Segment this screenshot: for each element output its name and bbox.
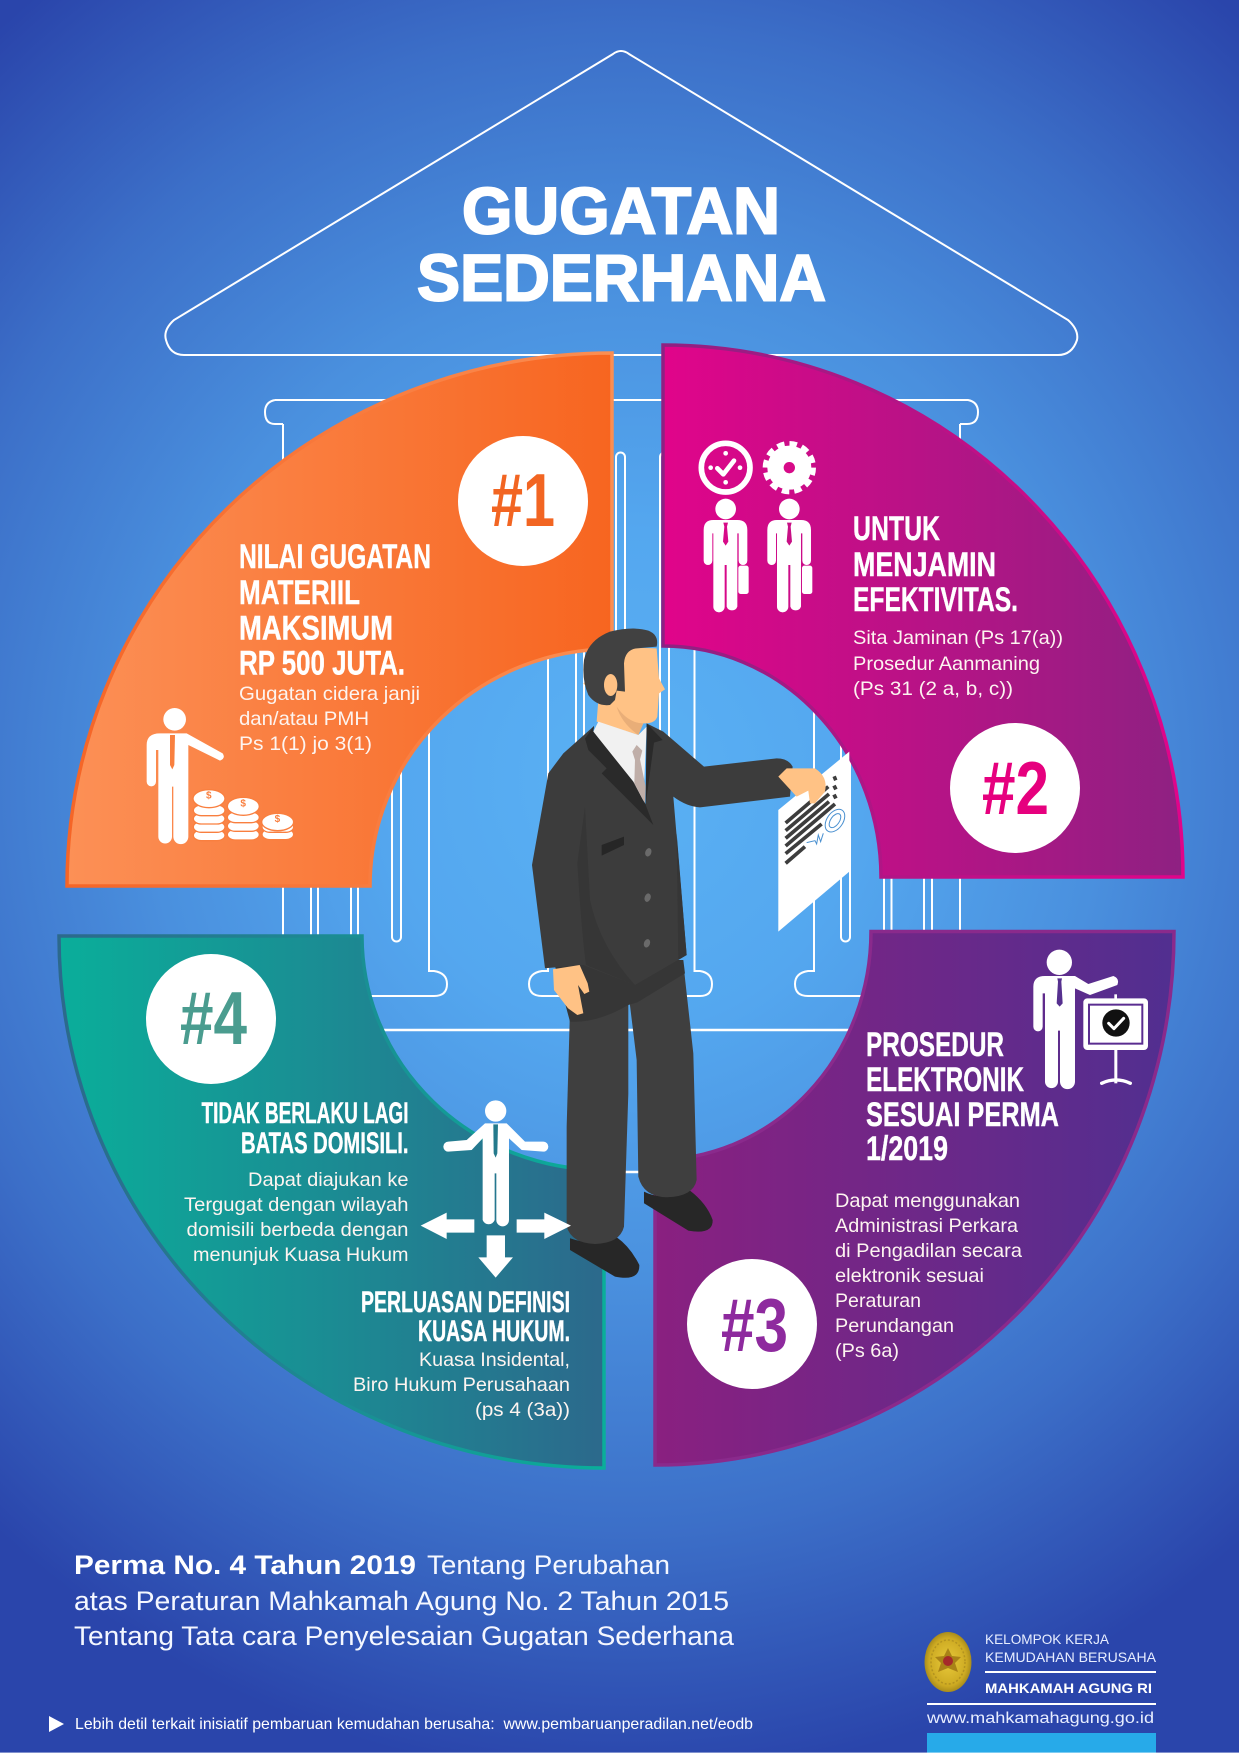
text 3: Administrasi Perkara (835, 1215, 1018, 1237)
heading 1: MATERIIL (239, 574, 360, 612)
heading 3 (866, 1026, 1059, 1168)
badge #1: #1 (491, 458, 555, 542)
title (417, 174, 826, 314)
organisation block: KELOMPOK KERJA (985, 1631, 1110, 1647)
column outlines of courthouse (265, 400, 980, 1172)
title: SEDERHANA (417, 240, 826, 314)
heading 1: NILAI GUGATAN (239, 538, 431, 576)
shirt (593, 722, 647, 804)
text 2: Prosedur Aanmaning (853, 653, 1040, 675)
heading 3: ELEKTRONIK (866, 1061, 1024, 1099)
hair (583, 629, 657, 705)
organisation block (926, 1631, 1157, 1753)
badge #3: #3 (721, 1283, 788, 1367)
badge #2: #2 (982, 746, 1049, 830)
panel 3: purple quarter ring (655, 932, 1174, 1465)
text 1: Gugatan cidera janji (239, 683, 420, 705)
heading 2 (853, 510, 1018, 619)
badge #4 (146, 954, 276, 1084)
footer title (74, 1550, 735, 1651)
illustration: businessman holding document (532, 629, 849, 1278)
icon: presenter with board (1033, 950, 1148, 1089)
jacket (532, 723, 793, 985)
heading 4a (202, 1097, 408, 1160)
heading 4a: BATAS DOMISILI. (241, 1127, 408, 1160)
heading 2: UNTUK (853, 510, 940, 548)
icon: man with direction arrows (421, 1100, 571, 1278)
text 4a: Tergugat dengan wilayah (184, 1194, 408, 1216)
roof outline of courthouse (165, 51, 1077, 355)
heading 4b: KUASA HUKUM. (418, 1315, 570, 1348)
text 4a: Dapat diajukan ke (248, 1169, 408, 1191)
text 1: dan/atau PMH (239, 708, 369, 730)
footer title: Tentang Tata cara Penyelesaian Gugatan Sederhana (74, 1621, 735, 1651)
text 3 (835, 1190, 1022, 1362)
title: GUGATAN (462, 174, 780, 248)
footer link line: Lebih detil terkait inisiatif pembaruan kemudahan berusaha: www.pembaruanperadilan.net/eodb (75, 1716, 753, 1733)
text 3: Dapat menggunakan (835, 1190, 1020, 1212)
text 3: elektronik sesuai (835, 1265, 984, 1287)
organisation block: MAHKAMAH AGUNG RI (985, 1680, 1152, 1696)
heading 4b (361, 1286, 570, 1348)
organisation block: KEMUDAHAN BERUSAHA (985, 1649, 1157, 1665)
footer title: Perma No. 4 Tahun 2019 (74, 1550, 416, 1580)
text 1: Ps 1(1) jo 3(1) (239, 733, 372, 755)
text 3: Peraturan (835, 1290, 921, 1312)
legs and shoes (553, 960, 713, 1278)
heading 4a: TIDAK BERLAKU LAGI (202, 1097, 408, 1130)
text 4b (353, 1349, 570, 1421)
heading 3: SESUAI PERMA (866, 1096, 1059, 1134)
logo: Mahkamah Agung seal (924, 1632, 972, 1692)
panel 1: orange quarter ring (67, 353, 612, 886)
badge #4: #4 (180, 976, 247, 1060)
torso, head and arms (532, 629, 849, 1015)
heading 2: EFEKTIVITAS. (853, 581, 1018, 619)
text 4a (184, 1169, 408, 1266)
lapels (585, 726, 653, 825)
holding hand (778, 768, 826, 803)
text 1 (239, 683, 420, 755)
doc (778, 752, 849, 932)
text 4a: domisili berbeda dengan (186, 1219, 408, 1241)
panel 2: magenta quarter ring (663, 345, 1183, 877)
text 4b: (ps 4 (3a)) (475, 1399, 570, 1421)
footer title: Tentang Perubahan (427, 1550, 670, 1580)
text 3: (Ps 6a) (835, 1340, 899, 1362)
text 2: (Ps 31 (2 a, b, c)) (853, 678, 1013, 700)
text 2 (853, 627, 1063, 700)
icon: man with coins: $ (206, 791, 212, 802)
lower hand (553, 965, 589, 1015)
icon: man with coins: $ (275, 814, 281, 825)
neck and face (583, 648, 665, 735)
panel 4: teal quarter ring (59, 936, 604, 1468)
icon: man with coins: $ (240, 798, 246, 809)
heading 4b: PERLUASAN DEFINISI (361, 1286, 570, 1319)
text 3: di Pengadilan secara (835, 1240, 1022, 1262)
badge #3 (687, 1259, 817, 1389)
heading 2: MENJAMIN (853, 546, 996, 584)
heading 1 (239, 538, 431, 682)
footer title: atas Peraturan Mahkamah Agung No. 2 Tahun 2015 (74, 1586, 729, 1616)
text 3: Perundangan (835, 1315, 954, 1337)
heading 3: 1/2019 (866, 1130, 948, 1168)
text 2: Sita Jaminan (Ps 17(a)) (853, 627, 1063, 649)
text 4b: Kuasa Insidental, (419, 1349, 570, 1371)
text 4a: menunjuk Kuasa Hukum (193, 1244, 408, 1266)
icon: two men with clock and gear (701, 443, 813, 612)
heading 3: PROSEDUR (866, 1026, 1004, 1064)
badge #2 (950, 723, 1080, 853)
heading 1: RP 500 JUTA. (239, 644, 405, 682)
text 4b: Biro Hukum Perusahaan (353, 1374, 570, 1396)
icon: man with coins (147, 708, 294, 844)
heading 1: MAKSIMUM (239, 610, 393, 648)
badge #1 (458, 436, 588, 566)
organisation block: www.mahkamahagung.go.id (926, 1710, 1154, 1727)
